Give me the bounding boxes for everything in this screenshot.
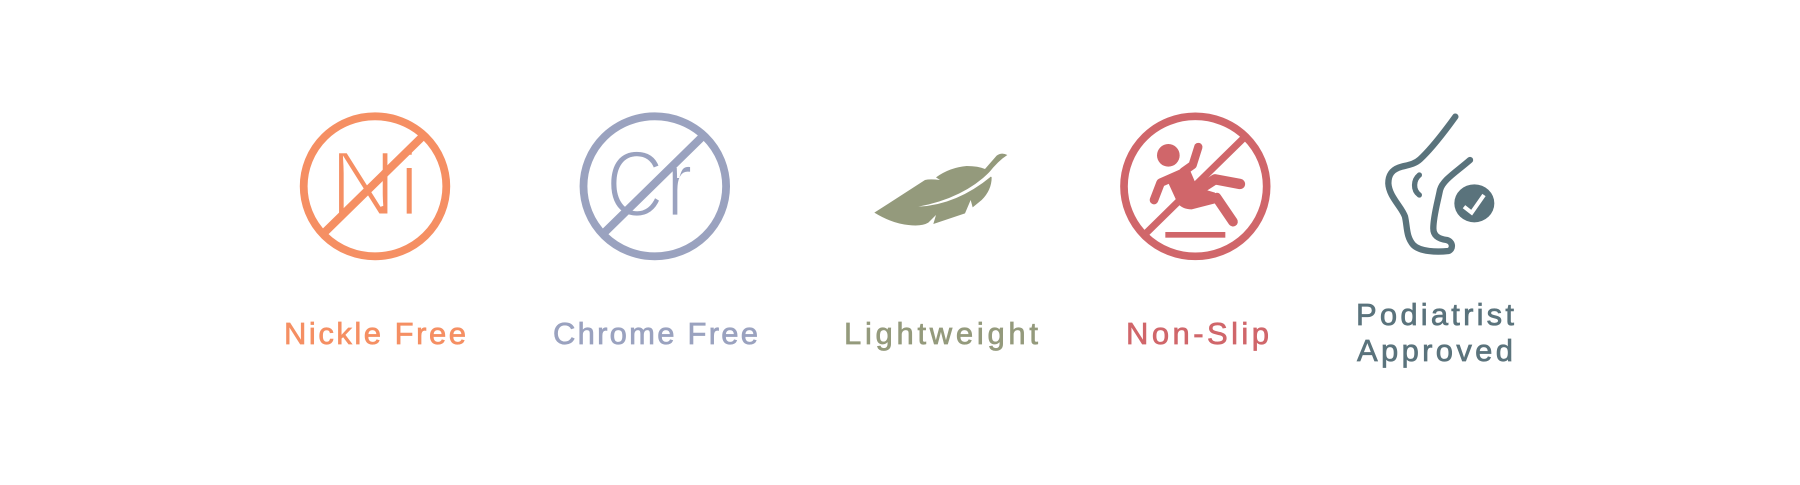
icon: no nickel	[304, 116, 446, 256]
panel: lightweight	[844, 154, 1038, 351]
label: lightweight: Lightweight	[844, 316, 1038, 351]
icon: foot with check	[1388, 117, 1494, 252]
label: non-slip: Non-Slip	[1126, 316, 1269, 351]
label: nickle free: Nickle Free	[284, 316, 466, 351]
panel: nickle free	[284, 116, 466, 351]
panel: non-slip	[1124, 116, 1269, 351]
panel: chrome free	[553, 116, 758, 351]
label: chrome free: Chrome Free	[553, 316, 758, 351]
icon: no chrome: Cr	[606, 132, 693, 236]
icon: no chrome	[584, 116, 726, 256]
panel: podiatrist approved	[1356, 117, 1514, 368]
label: podiatrist approved: Podiatrist	[1356, 297, 1514, 332]
icon: no nickel: Ni	[330, 133, 419, 235]
label: podiatrist approved: Approved	[1357, 333, 1513, 368]
label: podiatrist approved	[1356, 297, 1514, 368]
icon: feather	[874, 154, 1007, 225]
icon: no slip	[1124, 116, 1267, 256]
